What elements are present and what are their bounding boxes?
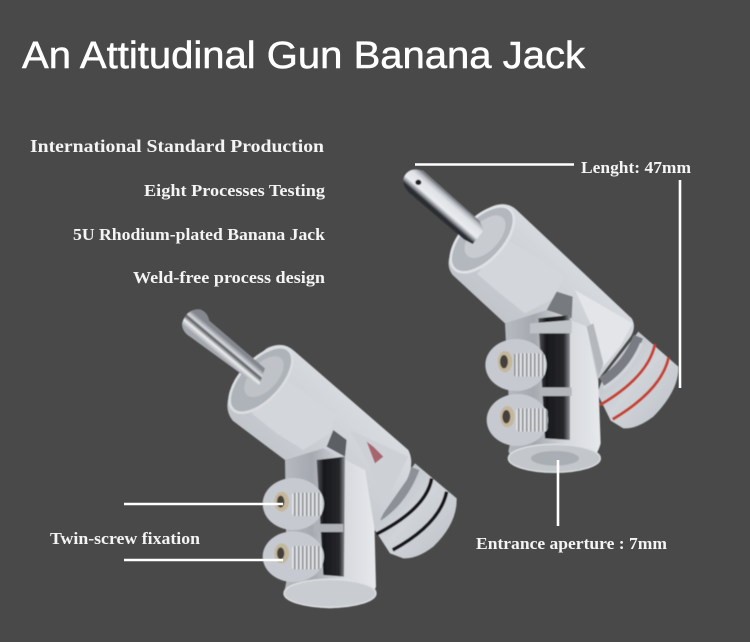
- dark stripe: [317, 457, 345, 577]
- length label: Lenght: 47mm: [581, 158, 691, 177]
- title: An Attitudinal Gun Banana Jack: [22, 35, 586, 77]
- length dimension lines: [415, 164, 680, 388]
- aperture label: Entrance aperture : 7mm: [476, 534, 667, 553]
- knob: [375, 463, 457, 558]
- lower screw: [263, 531, 324, 582]
- feature: eight processes: Eight Processes Testing: [144, 181, 326, 200]
- dark stripe: [538, 315, 570, 440]
- twin-screw leader lines: [124, 504, 283, 560]
- upper screw: [263, 478, 324, 530]
- product: left banana jack with black rings: [182, 309, 457, 608]
- vertical body: [505, 293, 601, 473]
- vertical body: [284, 437, 376, 608]
- angled clear cylinder: [227, 345, 411, 532]
- pin: [182, 309, 265, 385]
- bottom flange: [284, 579, 376, 607]
- bottom flange: [508, 444, 600, 472]
- product: right banana jack with red rings: [403, 169, 678, 473]
- lower screw: [487, 394, 548, 446]
- feature: rhodium plated: 5U Rhodium-plated Banana Jack: [73, 225, 326, 244]
- aperture leader line: [557, 460, 559, 526]
- angled clear cylinder: [449, 204, 634, 380]
- end ring: [439, 195, 525, 283]
- feature: international standard: International Standard Production: [30, 136, 324, 156]
- twin-screw label: Twin-screw fixation: [50, 529, 201, 548]
- upper screw: [485, 339, 547, 391]
- feature: weld-free: Weld-free process design: [133, 268, 326, 287]
- inner metal: [252, 375, 337, 450]
- end ring: [219, 337, 303, 423]
- knob: [597, 332, 678, 428]
- pin: [403, 169, 484, 244]
- feature list: [30, 136, 326, 287]
- inner metal: [477, 237, 565, 313]
